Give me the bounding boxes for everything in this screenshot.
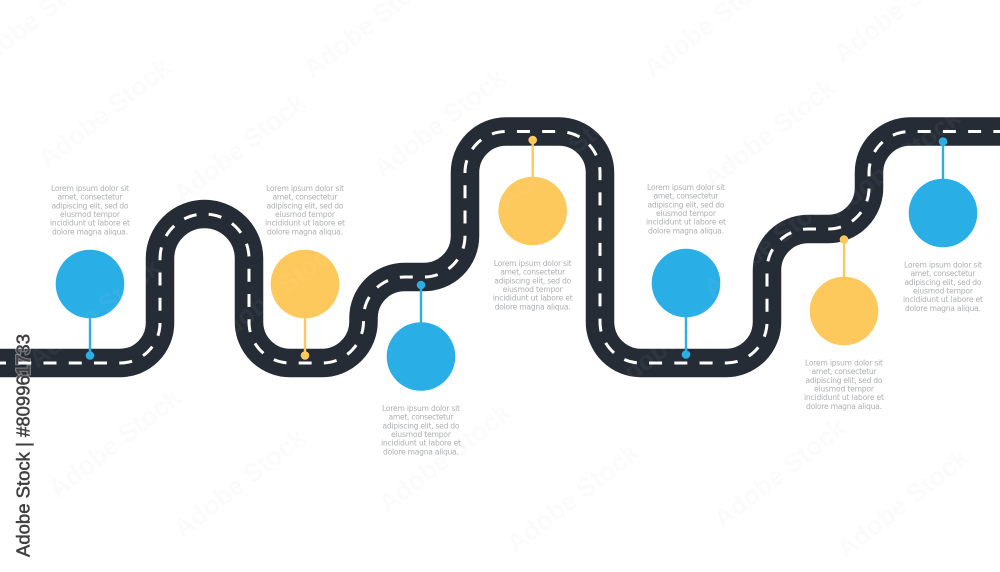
watermark: front layer: Adobe Stock bbox=[603, 277, 747, 399]
milestone 3: text: adipiscing elit, sed do bbox=[382, 421, 460, 430]
watermark: front layer: Adobe Stock bbox=[823, 102, 967, 224]
milestone 3: text bbox=[381, 404, 461, 456]
milestone 2: text: adipiscing elit, sed do bbox=[266, 201, 344, 210]
milestone 2: text bbox=[265, 184, 345, 236]
milestone 4: text: eiusmod tempor bbox=[503, 285, 564, 294]
milestone 3: text: Lorem ipsum dolor sit bbox=[382, 404, 460, 413]
milestone 4: text: Lorem ipsum dolor sit bbox=[494, 259, 572, 268]
milestone 1: text: dolore magna aliqua. bbox=[52, 227, 128, 236]
milestone 5: text bbox=[646, 183, 726, 235]
milestone 3: text: dolore magna aliqua. bbox=[383, 447, 459, 456]
watermark: front layer bbox=[23, 92, 967, 399]
milestone 3: text: incididunt ut labore et bbox=[381, 439, 461, 448]
milestone 6: text: adipiscing elit, sed do bbox=[806, 376, 883, 385]
stock credit halo and text: Adobe Stock | #809961733 bbox=[12, 334, 34, 557]
watermark: front layer: Adobe Stock bbox=[698, 182, 842, 304]
milestone 7: text: adipiscing elit, sed do bbox=[904, 278, 982, 287]
milestone 2: text: Lorem ipsum dolor sit bbox=[266, 184, 344, 193]
milestone 5: text: amet, consectetur bbox=[654, 192, 719, 201]
milestone 6: text: incididunt ut labore et bbox=[804, 393, 884, 402]
milestone 5: text: dolore magna aliqua. bbox=[648, 226, 724, 235]
milestone 1: text: incididunt ut labore et bbox=[50, 219, 130, 228]
milestone 6: text: dolore magna aliqua. bbox=[806, 402, 882, 411]
milestone 1: text bbox=[50, 184, 130, 236]
milestone 6: text bbox=[804, 358, 884, 411]
milestone 3: text: amet, consectetur bbox=[388, 413, 454, 422]
milestone 5: text: Lorem ipsum dolor sit bbox=[647, 183, 725, 192]
milestone 1: blue pin bbox=[56, 250, 124, 360]
milestone 7: text: incididunt ut labore et bbox=[903, 295, 983, 304]
milestone 5: blue pin bbox=[652, 249, 720, 359]
milestone 2: text: eiusmod tempor bbox=[275, 210, 336, 219]
milestone 6: text: Lorem ipsum dolor sit bbox=[805, 358, 883, 368]
watermark: front layer: Adobe Stock bbox=[203, 232, 347, 354]
watermark: front layer: Adobe Stock bbox=[493, 92, 637, 214]
milestone 5: text: eiusmod tempor bbox=[656, 209, 717, 218]
milestone 1: text: adipiscing elit, sed do bbox=[52, 201, 129, 210]
milestone 4: text bbox=[493, 259, 573, 311]
milestone 4: text: dolore magna aliqua. bbox=[495, 302, 571, 311]
milestone 7: text: amet, consectetur bbox=[910, 269, 976, 278]
milestone 7: text: dolore magna aliqua. bbox=[905, 304, 981, 313]
milestone 3: blue pin bbox=[387, 281, 455, 391]
milestone 1: text: eiusmod tempor bbox=[60, 210, 121, 219]
milestone 3: text: eiusmod tempor bbox=[391, 430, 452, 439]
milestone 4: text: adipiscing elit, sed do bbox=[494, 276, 572, 285]
milestone 6: text: amet, consectetur bbox=[812, 367, 877, 376]
milestone 2: yellow pin bbox=[271, 250, 339, 360]
stock credit halo and text: Adobe Stock | #809961733 bbox=[12, 334, 34, 557]
milestone 7: blue pin bbox=[909, 137, 977, 247]
milestone 2: text: dolore magna aliqua. bbox=[267, 227, 343, 236]
milestone 5: text: adipiscing elit, sed do bbox=[648, 200, 725, 209]
milestone 6: text: eiusmod tempor bbox=[814, 384, 875, 394]
milestone 2: text: incididunt ut labore et bbox=[265, 219, 345, 228]
milestone 4: text: incididunt ut labore et bbox=[493, 294, 573, 303]
milestone 1: text: amet, consectetur bbox=[58, 193, 123, 202]
milestone 7: text bbox=[903, 260, 983, 313]
milestone 1: text: Lorem ipsum dolor sit bbox=[51, 184, 129, 193]
milestone 7: text: Lorem ipsum dolor sit bbox=[904, 260, 982, 270]
milestone 4: text: amet, consectetur bbox=[500, 268, 566, 277]
milestone 6: yellow pin bbox=[810, 235, 878, 345]
milestone 7: text: eiusmod tempor bbox=[913, 286, 974, 296]
watermark: front layer: Adobe Stock bbox=[23, 252, 167, 374]
winding road bbox=[0, 132, 1000, 363]
milestone 5: text: incididunt ut labore et bbox=[646, 218, 726, 227]
milestone 4: yellow pin bbox=[498, 136, 567, 245]
milestone 2: text: amet, consectetur bbox=[272, 193, 338, 202]
